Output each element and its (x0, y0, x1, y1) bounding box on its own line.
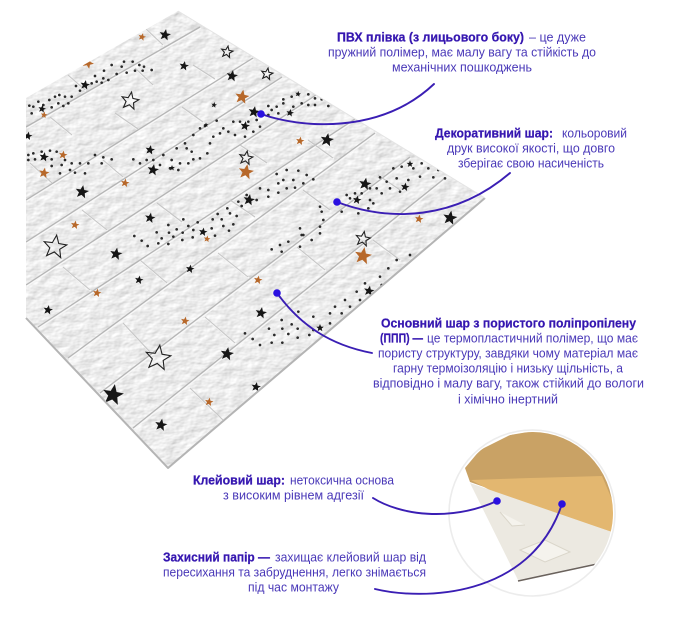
panel underside (518, 564, 597, 581)
text: protective paper (163, 550, 426, 594)
text: decorative layer: кольоровий (562, 126, 627, 140)
brick mortar lines (26, 27, 446, 429)
leader: foam layer (273, 289, 372, 353)
text: decorative layer (435, 126, 627, 170)
orange stars (38, 32, 424, 406)
text: PVC film: пружний полімер, має малу вагу та стійкість до (328, 44, 596, 60)
text: PVC film: ПВХ плівка (з лицьового боку) (337, 30, 524, 44)
text: foam layer (373, 316, 644, 406)
panel: decorated brick wall sheet (20, 5, 490, 475)
outline stars (42, 45, 371, 370)
protective paper flap (471, 476, 616, 532)
text: adhesive layer: з високим рівнем адгезії (223, 488, 364, 502)
leader: adhesive layer (373, 497, 501, 514)
text: decorative layer: зберігає свою насиченість (458, 156, 604, 170)
text: protective paper: Захисний папір — (163, 550, 270, 564)
text: PVC film (328, 30, 596, 74)
text: protective paper: захищає клейовий шар від (275, 550, 426, 564)
text: adhesive layer (193, 472, 395, 502)
text: PVC film: – це дуже (529, 30, 586, 44)
inset: peeled adhesive corner (449, 430, 616, 596)
text: foam layer: пористу структуру, завдяки чому матеріал має (378, 346, 638, 360)
panel edges (26, 11, 485, 468)
leader: protective paper (375, 500, 566, 594)
panel texture (20, 5, 490, 475)
black stars (23, 28, 458, 431)
text: decorative layer: друк високої якості, що довго (447, 140, 615, 156)
leader: PVC film (257, 84, 434, 124)
leader: decorative layer (333, 173, 510, 214)
inset ring (449, 430, 615, 596)
printed dots (28, 62, 328, 345)
text: decorative layer: Декоративний шар: (435, 126, 553, 140)
text: adhesive layer: Клейовий шар: (193, 472, 285, 488)
text: foam layer: Основний шар з пористого поліпропілену (381, 316, 637, 330)
foam relief (500, 512, 570, 562)
text: protective paper: пересихання та забруднення, легко знімається (163, 564, 426, 580)
text: protective paper: під час монтажу (248, 580, 339, 594)
foam layer (470, 483, 612, 580)
text: foam layer: це термопластичний полімер, що має (427, 330, 638, 346)
adhesive layer (465, 430, 614, 532)
text: PVC film: механічних пошкоджень (392, 60, 532, 74)
text: foam layer: гарну термоізоляцію і низьку щільність, а (393, 360, 624, 376)
callout leader lines (257, 84, 566, 594)
text: foam layer: відповідно і малу вагу, також стійкий до вологи (373, 376, 644, 390)
text: foam layer: (ППП) — (380, 330, 423, 346)
text: foam layer: і хімічно інертний (458, 392, 558, 406)
text: adhesive layer: нетоксична основа (290, 472, 395, 488)
